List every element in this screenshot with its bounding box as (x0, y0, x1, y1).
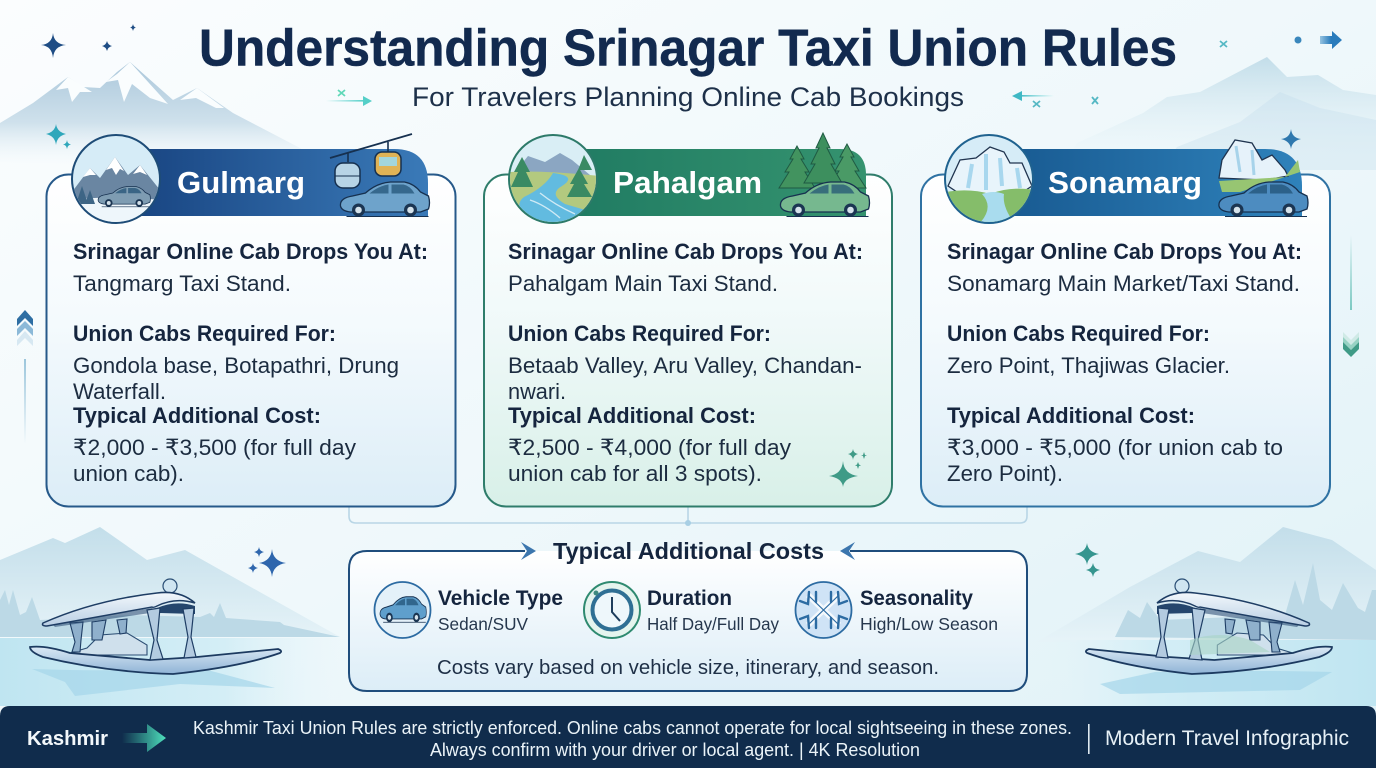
text: cost: Zero Point). (947, 461, 1063, 486)
text: cost (947, 403, 1283, 486)
decorative sparkles and arrows (17, 24, 1359, 577)
footer bar (0, 706, 1376, 768)
text: cost (73, 403, 357, 486)
panel box (349, 551, 1027, 691)
text: drop point: Srinagar Online Cab Drops You At: (508, 239, 863, 264)
footer message (193, 717, 1072, 760)
item: duration (584, 582, 779, 638)
heading: Sonamarg: Sonamarg (1048, 165, 1202, 200)
banner: Gulmarg (120, 149, 428, 216)
icon: car (374, 582, 430, 638)
text: cost: Typical Additional Cost: (508, 403, 756, 428)
text: union cabs: nwari. (508, 379, 566, 404)
text: cost: union cab for all 3 spots). (508, 461, 762, 486)
heading: Pahalgam: Pahalgam (613, 165, 762, 200)
item: seasonality (796, 582, 998, 638)
text: cost: union cab). (73, 461, 184, 486)
panel heading: Typical Additional Costs (553, 538, 824, 564)
item: seasonality: Seasonality (860, 587, 973, 610)
banner: Pahalgam (555, 149, 866, 216)
connector lines (349, 507, 1027, 523)
text: cost: Typical Additional Cost: (73, 403, 321, 428)
text: union cabs: Waterfall. (73, 379, 166, 404)
card: Sonamarg (921, 174, 1330, 506)
text: drop point: Pahalgam Main Taxi Stand. (508, 271, 778, 296)
item: vehicle type: Vehicle Type (438, 587, 563, 610)
panel: typical additional costs (349, 538, 1027, 691)
text: cost: ₹2,000 - ₹3,500 (for full day (73, 435, 357, 460)
text: cost: ₹2,500 - ₹4,000 (for full day (508, 435, 792, 460)
text: drop point: Srinagar Online Cab Drops You At: (947, 239, 1302, 264)
text: union cabs: Betaab Valley, Aru Valley, Chandan- (508, 353, 862, 378)
note: Costs vary based on vehicle size, itinerary, and season. (437, 656, 939, 679)
subtitle: For Travelers Planning Online Cab Bookings (412, 82, 964, 112)
boat: right shikara (1086, 579, 1332, 674)
heading: Gulmarg: Gulmarg (177, 165, 305, 200)
item: seasonality: High/Low Season (860, 614, 998, 634)
panel: Gulmarg (46, 134, 456, 506)
arrow: right (840, 542, 855, 560)
item: vehicle type: Sedan/SUV (438, 614, 528, 634)
item: duration: Duration (647, 587, 732, 610)
footer message: Always confirm with your driver or local agent. | 4K Resolution (430, 739, 920, 760)
panel: Sonamarg (921, 135, 1330, 506)
text: union cabs: Union Cabs Required For: (947, 321, 1210, 346)
icon: gulmarg badge (72, 135, 160, 225)
icon: gondola and car (330, 134, 430, 216)
text: drop point: Srinagar Online Cab Drops You At: (73, 239, 428, 264)
text: union cabs: Union Cabs Required For: (73, 321, 336, 346)
text: drop point (947, 239, 1302, 296)
item: duration: Half Day/Full Day (647, 614, 779, 634)
icon: glacier and car (1219, 140, 1308, 216)
panel: Pahalgam (484, 133, 892, 506)
text: union cabs: Gondola base, Botapathri, Drung (73, 353, 399, 378)
text: drop point: Sonamarg Main Market/Taxi Stand. (947, 271, 1300, 296)
icon: sparkles (829, 449, 867, 487)
footer label: Kashmir (27, 728, 108, 750)
lake scene right (1030, 527, 1376, 706)
text: drop point (73, 239, 428, 296)
footer tagline: Modern Travel Infographic (1105, 726, 1349, 750)
text: union cabs: Union Cabs Required For: (508, 321, 771, 346)
arrow: left (521, 542, 536, 560)
footer message: Kashmir Taxi Union Rules are strictly enforced. Online cabs cannot operate for local sightseeing in these zones. (193, 717, 1072, 738)
text: cost (508, 403, 792, 486)
text: union cabs (508, 321, 862, 404)
text: cost: Typical Additional Cost: (947, 403, 1195, 428)
text: union cabs (73, 321, 399, 404)
title: Understanding Srinagar Taxi Union Rules (199, 18, 1177, 76)
text: union cabs: Zero Point, Thajiwas Glacier. (947, 353, 1230, 378)
banner: Sonamarg (990, 149, 1302, 216)
text: drop point: Tangmarg Taxi Stand. (73, 271, 291, 296)
boat: left shikara (30, 579, 281, 674)
icon: pine trees and car (779, 133, 870, 216)
icon: pahalgam badge (509, 135, 600, 226)
card: Pahalgam (484, 174, 892, 506)
item: vehicle type (374, 582, 563, 638)
text: union cabs (947, 321, 1230, 378)
text: cost: ₹3,000 - ₹5,000 (for union cab to (947, 435, 1283, 460)
icon: clock (584, 582, 640, 638)
text: drop point (508, 239, 863, 296)
card: Gulmarg (46, 174, 456, 506)
icon: sonamarg badge (945, 135, 1035, 225)
arrow: footer (122, 724, 166, 752)
icon: snowflake (796, 582, 852, 638)
lake scene left (0, 527, 346, 706)
